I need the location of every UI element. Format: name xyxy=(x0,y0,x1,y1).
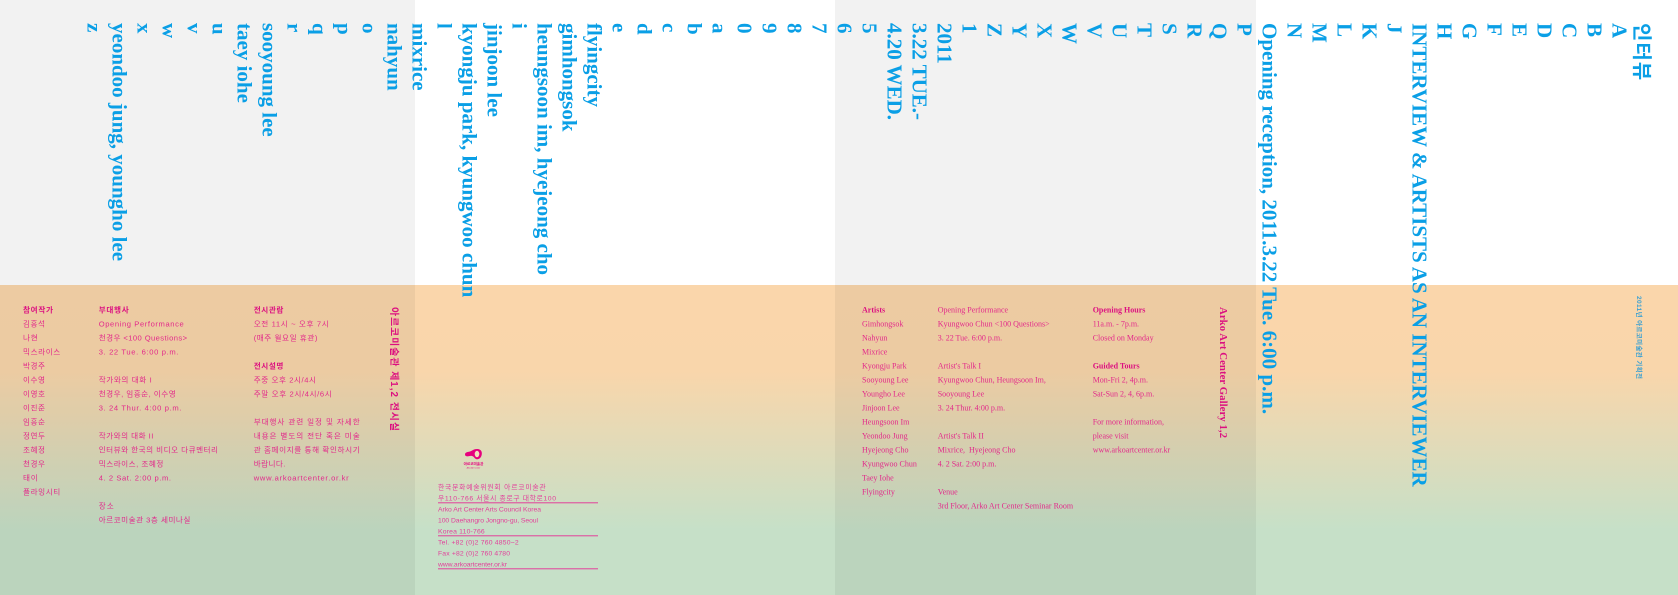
logo: 아르코미술관 xyxy=(464,461,484,466)
korean events list: 인터뷰와 한국의 비디오 다큐멘터리 xyxy=(99,444,218,454)
vertical blue title poem: z xyxy=(82,23,106,32)
address block: 100 Daehangro Jongno-gu, Seoul xyxy=(438,518,538,524)
korean artists list: 이영호 xyxy=(23,388,45,398)
vertical blue title poem: 8 xyxy=(782,23,806,34)
korean events list: 아르코미술관 3층 세미나실 xyxy=(99,514,190,524)
vertical blue title poem: kyongju park, kyungwoo chun xyxy=(457,23,481,298)
english hours and tours xyxy=(1093,306,1170,454)
english events list: Mixrice, Hyejeong Cho xyxy=(938,446,1015,454)
logo: Arko Art Center xyxy=(467,466,481,470)
english events list: 3rd Floor, Arko Art Center Seminar Room xyxy=(938,502,1074,510)
korean artists list: 천경우 xyxy=(23,458,45,468)
korean hours and tours: 전시관람 xyxy=(254,304,283,314)
vertical blue title poem: K xyxy=(1357,23,1381,40)
korean hours and tours: 부대행사 관련 일정 및 자세한 xyxy=(254,416,360,426)
english artists list: Kyungwoo Chun xyxy=(862,460,917,468)
korean hours and tours: 주중 오후 2시/4시 xyxy=(254,376,316,384)
vertical blue title poem: S xyxy=(1157,23,1181,35)
vertical blue title poem: v xyxy=(182,23,206,34)
vertical blue title poem: Q xyxy=(1207,23,1231,39)
address block: Korea 110-766 xyxy=(438,528,485,536)
korean artists list: 나현 xyxy=(23,334,38,342)
english events list: Kyungwoo Chun <100 Questions> xyxy=(938,320,1050,328)
korean artists list: 박경주 xyxy=(23,360,45,370)
vertical blue title poem: 9 xyxy=(757,23,781,34)
korean artists list: 조혜정 xyxy=(23,444,45,454)
vertical blue title poem: i xyxy=(507,23,531,29)
english hours and tours: 11a.m. - 7p.m. xyxy=(1093,320,1139,328)
korean hours and tours: 바랍니다. xyxy=(254,458,285,468)
vertical blue title poem: Y xyxy=(1007,23,1031,38)
vertical blue title poem: r xyxy=(282,23,306,32)
english artists list xyxy=(862,306,917,496)
vertical blue title poem: d xyxy=(632,23,656,35)
korean hours and tours: (매주 월요일 휴관) xyxy=(254,332,318,342)
vertical blue title poem: W xyxy=(1057,23,1081,44)
english gallery vertical label: Arko Art Center Gallery 1,2 xyxy=(1217,307,1229,438)
vertical blue title poem: L xyxy=(1332,23,1356,37)
vertical blue title poem: 5 xyxy=(857,23,881,34)
vertical blue title poem: E xyxy=(1507,23,1531,37)
vertical blue title poem: 7 xyxy=(807,23,831,34)
vertical blue title poem: c xyxy=(657,23,681,32)
english artists list: Mixrice xyxy=(862,348,888,356)
english artists list: Nahyun xyxy=(862,334,887,342)
vertical blue title poem: V xyxy=(1082,23,1106,38)
vertical blue title poem: P xyxy=(1232,23,1256,36)
vertical blue title poem: R xyxy=(1182,23,1206,39)
vertical blue title poem: x xyxy=(132,23,156,34)
address block: 한국문화예술위원회 아르코미술관 xyxy=(438,482,546,492)
korean events list: 작가와의 대화 I xyxy=(99,374,152,384)
vertical blue title poem: u xyxy=(207,23,231,35)
korean artists list: 믹스라이스 xyxy=(23,346,60,356)
vertical blue title poem: INTERVIEW & ARTISTS AS AN INTERVIEWER xyxy=(1407,23,1431,487)
vertical blue title poem: e xyxy=(607,23,631,32)
korean events list: 부대행사 xyxy=(99,304,129,314)
vertical blue title poem: sooyoung lee xyxy=(257,23,281,137)
vertical blue title poem: F xyxy=(1482,23,1506,36)
vertical blue title poem: 3.22 TUE.- xyxy=(907,23,931,120)
english hours and tours: Mon-Fri 2, 4p.m. xyxy=(1093,376,1148,384)
vertical blue title poem: U xyxy=(1107,23,1131,38)
english hours and tours: Opening Hours xyxy=(1093,306,1145,314)
address block: www.arkoartcenter.or.kr xyxy=(437,562,508,568)
vertical blue title poem: gimhongsok xyxy=(557,23,581,132)
vertical blue title poem: 6 xyxy=(832,23,856,34)
english events list: 3. 24 Thur. 4:00 p.m. xyxy=(938,404,1005,412)
vertical blue title poem: jinjoon lee xyxy=(482,22,506,117)
english hours and tours: For more information, xyxy=(1093,418,1164,426)
english events list: 4. 2 Sat. 2:00 p.m. xyxy=(938,460,996,468)
english artists list: Heungsoon Im xyxy=(862,418,910,426)
vertical blue title poem: mixrice xyxy=(407,23,431,91)
english artists list: Artists xyxy=(862,306,885,314)
address block: Fax +82 (0)2 760 4780 xyxy=(438,550,510,558)
address block xyxy=(437,482,598,569)
vertical blue title poem: 2011 xyxy=(932,23,956,64)
vertical blue title poem: X xyxy=(1032,23,1056,38)
korean events list: Opening Performance xyxy=(99,320,184,328)
blue small vertical caption: 2011년 아르코미술관 기획전 xyxy=(1635,296,1644,379)
english artists list: Hyejeong Cho xyxy=(862,446,908,454)
korean events list: 천경우 <100 Questions> xyxy=(99,332,188,342)
korean hours and tours: 전시설명 xyxy=(254,360,283,370)
english hours and tours: www.arkoartcenter.or.kr xyxy=(1093,446,1170,454)
vertical blue title poem: yeondoo jung, youngho lee xyxy=(107,23,131,261)
vertical blue title poem: flyingcity xyxy=(582,23,606,107)
english events list: Artist's Talk II xyxy=(938,432,984,440)
korean artists list: 참여작가 xyxy=(23,304,53,314)
address block: Arko Art Center Arts Council Korea xyxy=(438,506,541,514)
vertical blue title poem: q xyxy=(307,23,331,35)
vertical blue title poem: w xyxy=(157,23,181,39)
korean gallery vertical label: 아르코미술관 제1,2 전시실 xyxy=(388,307,401,431)
vertical blue title poem: B xyxy=(1582,23,1606,37)
english events list: 3. 22 Tue. 6:00 p.m. xyxy=(938,334,1002,342)
korean events list: 작가와의 대화 II xyxy=(99,430,153,440)
english hours and tours: Sat-Sun 2, 4, 6p.m. xyxy=(1093,390,1154,398)
vertical blue title poem: o xyxy=(357,23,381,34)
english artists list: Taey Iohe xyxy=(862,474,894,482)
vertical blue title poem: Opening reception, 2011.3.22 Tue. 6:00 p.m. xyxy=(1257,23,1281,414)
english artists list: Youngho Lee xyxy=(862,390,905,398)
vertical blue title poem: l xyxy=(432,23,456,29)
english hours and tours: Guided Tours xyxy=(1093,362,1140,370)
vertical blue title poem: J xyxy=(1382,23,1406,34)
korean hours and tours: 내용은 별도의 전단 혹은 미술 xyxy=(254,430,360,440)
vertical blue title poem: 1 xyxy=(957,23,981,34)
vertical blue title poem: heungsoon im, hyejeong cho xyxy=(532,23,556,275)
vertical blue title poem: A xyxy=(1607,23,1631,39)
english events list: Opening Performance xyxy=(938,306,1009,314)
vertical blue title poem: T xyxy=(1132,23,1156,37)
english events list xyxy=(938,306,1074,510)
korean events list: 3. 22 Tue. 6:00 p.m. xyxy=(99,348,178,356)
korean artists list: 임흥순 xyxy=(23,416,45,426)
korean artists list: 이수영 xyxy=(23,374,45,384)
english events list: Sooyoung Lee xyxy=(938,390,985,398)
korean events list xyxy=(99,304,218,524)
korean hours and tours: 관 홈페이지를 통해 확인하시기 xyxy=(254,444,360,454)
address block: Tel. +82 (0)2 760 4850~2 xyxy=(438,540,519,546)
vertical blue title poem: 4.20 WED. xyxy=(882,23,906,120)
vertical blue title poem: p xyxy=(332,23,356,35)
korean events list: 장소 xyxy=(99,500,114,510)
vertical blue title poem: N xyxy=(1282,23,1306,38)
korean hours and tours: 주말 오후 2시/4시/6시 xyxy=(254,390,332,398)
address block: 우110-766 서울시 종로구 대학로100 xyxy=(438,494,556,502)
english artists list: Flyingcity xyxy=(862,488,895,496)
vertical blue title poem: G xyxy=(1457,23,1481,39)
english artists list: Kyongju Park xyxy=(862,362,907,370)
vertical blue title poem: D xyxy=(1532,23,1556,38)
english hours and tours: please visit xyxy=(1093,432,1129,440)
korean events list: 4. 2 Sat. 2:00 p.m. xyxy=(99,474,171,482)
vertical blue title poem: b xyxy=(682,23,706,35)
vertical blue title poem: M xyxy=(1307,23,1331,43)
english artists list: Yeondoo Jung xyxy=(862,432,908,440)
heading: 인터뷰: 인터뷰 xyxy=(1630,23,1653,81)
vertical blue title poem: nahyun xyxy=(382,23,406,91)
english artists list: Jinjoon Lee xyxy=(862,404,900,412)
english events list: Artist's Talk I xyxy=(938,362,981,370)
vertical blue title poem xyxy=(82,22,1631,487)
english hours and tours: Closed on Monday xyxy=(1093,334,1154,342)
korean hours and tours: www.arkoartcenter.or.kr xyxy=(253,474,349,482)
korean artists list: 이진준 xyxy=(23,402,45,412)
korean artists list: 플라잉시티 xyxy=(23,486,60,496)
vertical blue title poem: C xyxy=(1557,23,1581,38)
vertical blue title poem: H xyxy=(1432,23,1456,39)
korean hours and tours xyxy=(253,304,360,482)
korean events list: 3. 24 Thur. 4:00 p.m. xyxy=(99,404,181,412)
english events list: Venue xyxy=(938,488,958,496)
english artists list: Gimhongsok xyxy=(862,320,903,328)
english events list: Kyungwoo Chun, Heungsoon Im, xyxy=(938,376,1046,384)
english artists list: Sooyoung Lee xyxy=(862,376,909,384)
korean events list: 천경우, 임흥순, 이수영 xyxy=(99,388,176,398)
vertical blue title poem: 0 xyxy=(732,23,756,34)
logo xyxy=(464,449,484,470)
vertical blue title poem: taey iohe xyxy=(232,23,256,103)
korean artists list: 정연두 xyxy=(23,430,45,440)
vertical blue title poem: Z xyxy=(982,23,1006,37)
korean events list: 믹스라이스, 조혜정 xyxy=(99,458,163,468)
vertical blue title poem: a xyxy=(707,23,731,34)
korean hours and tours: 오전 11시 ~ 오후 7시 xyxy=(254,318,329,328)
korean artists list: 김홍석 xyxy=(23,318,45,328)
korean artists list: 태이 xyxy=(23,472,38,482)
korean artists list xyxy=(23,304,60,496)
